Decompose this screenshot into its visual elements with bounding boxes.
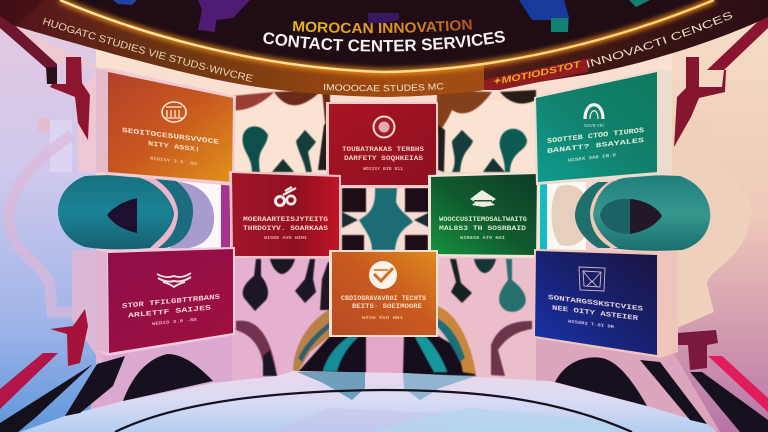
glowing light strip (60, 0, 714, 72)
panel text: STOR TFILGBTTRBANS (122, 294, 220, 311)
panel: green mid-right (428, 172, 540, 258)
panel text: WEDIS 3.0 ·R8 (152, 317, 197, 327)
panel: magenta bottom-left (96, 247, 235, 356)
right teal sculpture (538, 175, 710, 251)
panel text: NEE OITY ASTEIER (552, 305, 639, 323)
floor with dark curved line (20, 371, 717, 432)
panel text (342, 146, 425, 172)
icon: check badge (369, 261, 397, 289)
icon: temple emblem (162, 102, 186, 122)
decorative left wall relief (0, 12, 213, 432)
title: CONTACT CENTER SERVICES (263, 30, 505, 52)
panel: orange bottom-center (329, 250, 438, 337)
panel: navy bottom-right (534, 249, 678, 358)
panel text: TOUBATRAKAS TERBHS (342, 146, 425, 153)
panel text: WISH KVO HH1 (362, 317, 404, 321)
panel text: THRDOIYV. SOARKAAS (243, 225, 328, 232)
panel text: NITY ASSX! (148, 140, 200, 154)
panel text (122, 294, 220, 330)
panel: crimson mid-left (229, 171, 341, 259)
panel text: WIS8R3 T.0I 0R (568, 318, 614, 330)
panel text (341, 295, 426, 321)
panel text: SONTARGSSKSTCVIES (548, 294, 643, 314)
icon: arch mark: GSVB VRI (584, 123, 604, 128)
panel text: CBDIOGRAVAVR8I TECHTS (341, 295, 426, 302)
icon: round seal (372, 116, 396, 138)
icon: framed emblem (579, 267, 605, 291)
left teal sculpture (58, 175, 230, 252)
panel: crimson top-center (326, 102, 438, 188)
panel text: MOERAARTEISJYTEITG (243, 216, 328, 223)
band caption center: IMOOOCAE STUDES MC (324, 83, 444, 92)
panel text: MAL8S3 TH SOSRBAID (439, 225, 526, 232)
panel text: WIDISY 3.0 .RS (150, 155, 197, 167)
panel text: WDIISY BID 811 (363, 168, 404, 172)
panel text (547, 127, 644, 166)
curved sign band (0, 0, 768, 97)
panel text (548, 294, 643, 334)
panel: orange top-left (96, 68, 236, 186)
title: MOROCAN INNOVATION (293, 19, 472, 34)
band caption right (492, 12, 732, 84)
band caption right: ✦MOTIODSTOT (492, 60, 580, 84)
decorative central geometric cut-outs (232, 90, 536, 376)
panel text: SEOITOCESURSVVOCE (122, 127, 219, 147)
title (263, 19, 505, 52)
icon: open book waves (157, 273, 191, 287)
panel text (122, 127, 219, 170)
band caption right: INNOVACTI CENCES (586, 12, 732, 68)
panel text: DARFETY SOQHKEIAS (344, 155, 424, 162)
panel text (439, 216, 527, 241)
panel text: ARLETTF SAIJES (128, 304, 211, 320)
panel: teal top-right (534, 69, 672, 185)
panel text (243, 216, 328, 241)
band caption left: HUOGATC STUDIES VIE STUDS·WIVCRE (42, 18, 253, 82)
panel text: WISEX 3A0 CB.0 (568, 152, 616, 164)
header canopy (0, 0, 714, 72)
icon: crest (470, 190, 496, 207)
icon: swirl mark (276, 187, 296, 206)
panel text: WIR8S6 AT0 HSI (460, 237, 506, 241)
panel text: SOOTTEB CTOO TIUROS (547, 127, 644, 146)
panel text: BANATT? 8SAYALES (547, 137, 644, 156)
panel text: BEITS· SOEIMOORE (352, 303, 422, 310)
panel text: WISEE AVO WIH1 (264, 237, 308, 241)
decorative right wall relief (555, 12, 768, 432)
panel text: WOOCCUSITEMOSALTWAITG (439, 216, 527, 223)
